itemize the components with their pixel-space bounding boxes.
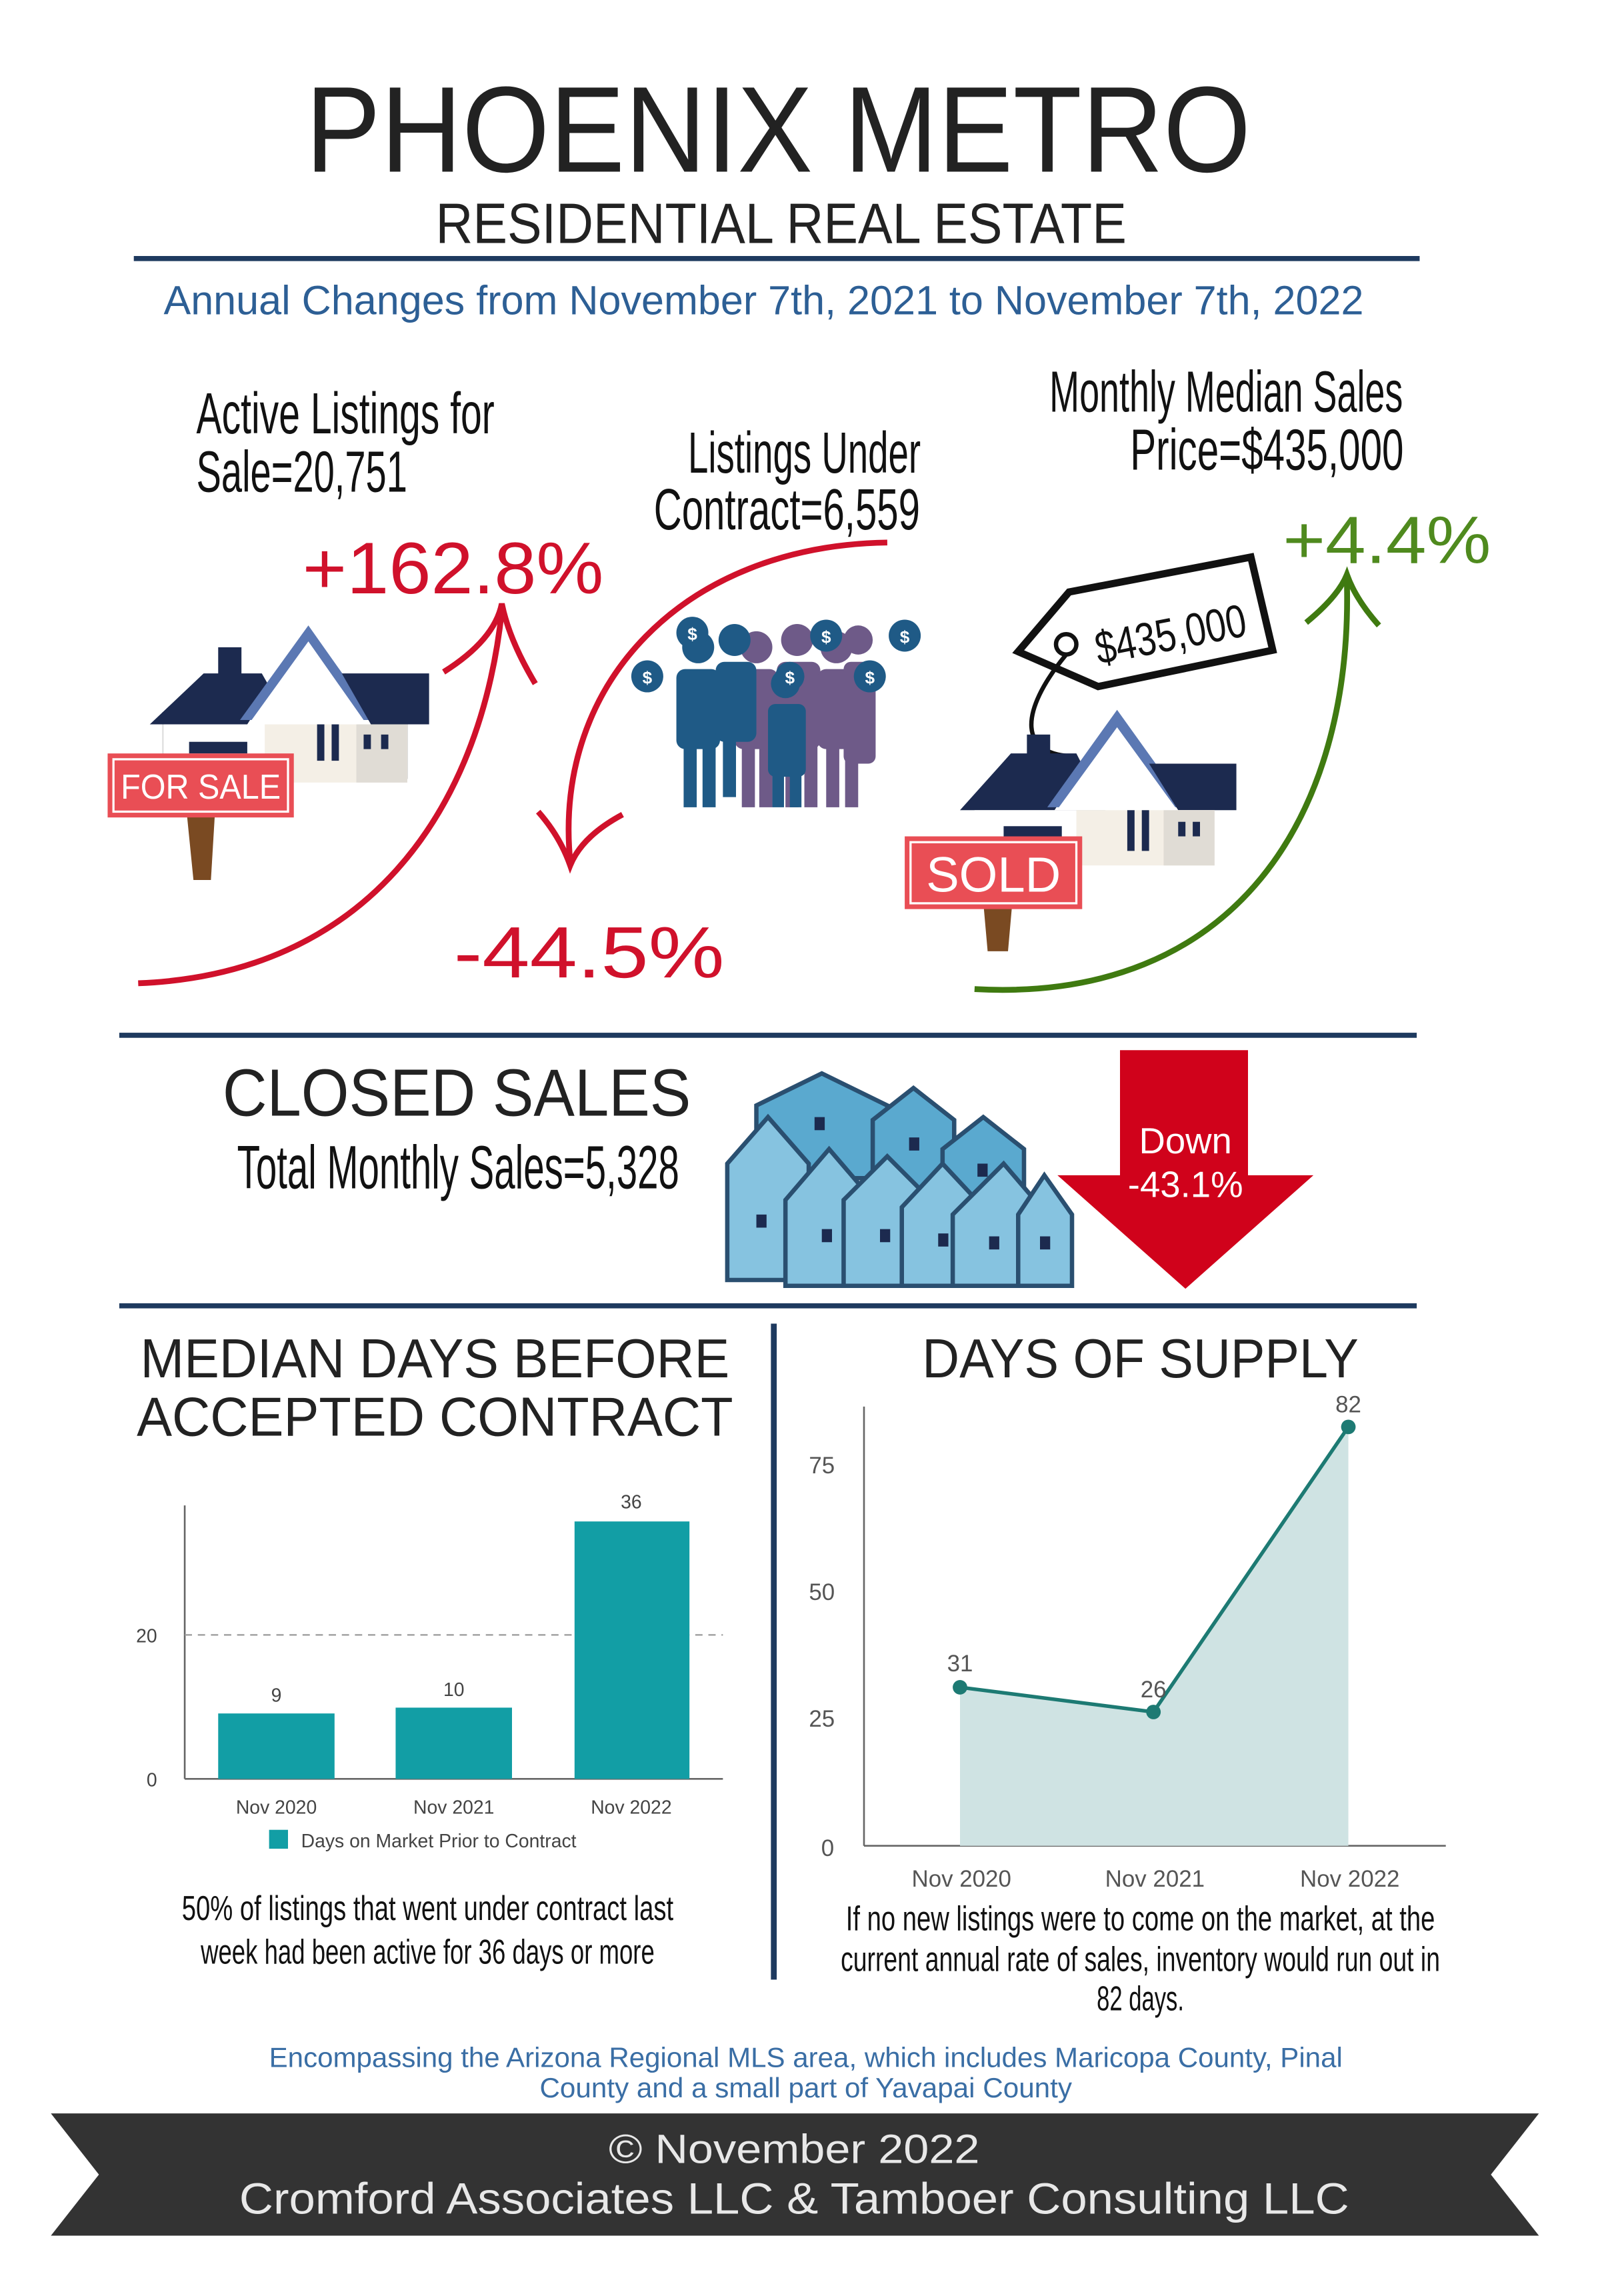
bar chart: 20 bbox=[136, 1625, 157, 1647]
panel: closed sales: Total Monthly Sales=5,328 bbox=[237, 1134, 679, 1202]
panel: median price: Price=$435,000 bbox=[1130, 418, 1403, 483]
icon: house for sale: FOR SALE bbox=[121, 768, 281, 807]
bar chart: 10 bbox=[443, 1679, 465, 1701]
line chart: 50 bbox=[809, 1579, 835, 1605]
subtitle: Annual Changes from November 7th, 2021 to November 7th, 2022 bbox=[163, 277, 1363, 323]
panel: closed sales bbox=[223, 1050, 1313, 1289]
caption: 50% of listings that went under contract last bbox=[182, 1889, 674, 1928]
panel: median days chart: MEDIAN DAYS BEFORE bbox=[141, 1327, 729, 1389]
bar chart: 9 bbox=[271, 1685, 281, 1707]
stat: +162.8%: +162.8% bbox=[303, 528, 603, 609]
line chart: Nov 2022 bbox=[1300, 1866, 1399, 1892]
icon: people with money: $ bbox=[900, 627, 910, 647]
panel: under contract: Contract=6,559 bbox=[654, 477, 920, 542]
footer banner: © November 2022 bbox=[609, 2126, 979, 2171]
icon: house sold bbox=[905, 710, 1237, 951]
icon: people with money: $ bbox=[643, 667, 653, 687]
panel: active listings bbox=[107, 381, 603, 983]
line chart: 26 bbox=[1141, 1677, 1167, 1703]
icon: house for sale bbox=[107, 625, 429, 880]
icon: houses cluster bbox=[727, 1073, 1072, 1286]
icon: people with money: $ bbox=[687, 624, 697, 644]
panel: closed sales: CLOSED SALES bbox=[223, 1055, 691, 1130]
bar chart: 0 bbox=[147, 1769, 157, 1791]
panel: days of supply: DAYS OF SUPPLY bbox=[922, 1327, 1359, 1389]
icon: people with money: $ bbox=[785, 667, 795, 687]
line chart: Nov 2020 bbox=[912, 1866, 1011, 1892]
line chart: 31 bbox=[947, 1651, 973, 1677]
panel: median price bbox=[905, 359, 1491, 990]
stat: +4.4%: +4.4% bbox=[1283, 503, 1491, 577]
caption: week had been active for 36 days or more bbox=[200, 1933, 655, 1971]
arrow: red down bbox=[538, 543, 887, 865]
bar chart: Nov 2021 bbox=[413, 1797, 494, 1819]
title: RESIDENTIAL REAL ESTATE bbox=[435, 192, 1127, 255]
icon: down arrow: Down bbox=[1139, 1121, 1232, 1161]
bar chart bbox=[136, 1492, 723, 1852]
panel: under contract: Listings Under bbox=[688, 421, 921, 485]
panel: median days chart: ACCEPTED CONTRACT bbox=[137, 1385, 733, 1447]
line chart: 75 bbox=[809, 1453, 835, 1479]
bar chart: Nov 2022 bbox=[591, 1797, 672, 1819]
footer banner: Cromford Associates LLC & Tamboer Consulting LLC bbox=[239, 2175, 1349, 2223]
bar chart: 36 bbox=[621, 1492, 642, 1513]
line chart: Nov 2021 bbox=[1105, 1866, 1205, 1892]
footnote bbox=[269, 2041, 1343, 2103]
arrow: red up bbox=[138, 603, 535, 983]
caption: 82 days. bbox=[1097, 1979, 1184, 2018]
panel: median days chart bbox=[136, 1327, 733, 1971]
title: PHOENIX METRO bbox=[305, 61, 1251, 197]
icon: price tag: $435,000 bbox=[1091, 594, 1251, 674]
legend: Days on Market Prior to Contract bbox=[301, 1831, 577, 1852]
title bbox=[305, 61, 1251, 255]
caption bbox=[182, 1889, 674, 1971]
icon: down arrow bbox=[1057, 1050, 1313, 1289]
line chart: 25 bbox=[809, 1706, 835, 1732]
line chart: 0 bbox=[821, 1835, 834, 1861]
icon: down arrow: -43.1% bbox=[1128, 1165, 1243, 1205]
panel: active listings: Sale=20,751 bbox=[197, 439, 407, 504]
bar chart: Nov 2020 bbox=[236, 1797, 317, 1819]
caption bbox=[841, 1899, 1440, 2018]
line chart bbox=[809, 1392, 1446, 1892]
panel: active listings: Active Listings for bbox=[197, 381, 495, 446]
footer banner bbox=[51, 2113, 1539, 2235]
arrow: green up bbox=[975, 575, 1379, 990]
icon: people with money: $ bbox=[821, 627, 831, 647]
icon: house sold: SOLD bbox=[926, 847, 1061, 902]
stat: -44.5%: -44.5% bbox=[454, 912, 725, 993]
icon: people with money bbox=[631, 617, 921, 807]
line chart: 82 bbox=[1335, 1392, 1361, 1418]
panel: under contract bbox=[454, 421, 921, 993]
icon: price tag bbox=[1018, 557, 1273, 757]
icon: people with money: $ bbox=[865, 667, 875, 687]
footnote: Encompassing the Arizona Regional MLS area, which includes Maricopa County, Pinal bbox=[269, 2041, 1343, 2073]
footnote: County and a small part of Yavapai County bbox=[539, 2072, 1072, 2103]
panel: days of supply bbox=[809, 1327, 1446, 2018]
